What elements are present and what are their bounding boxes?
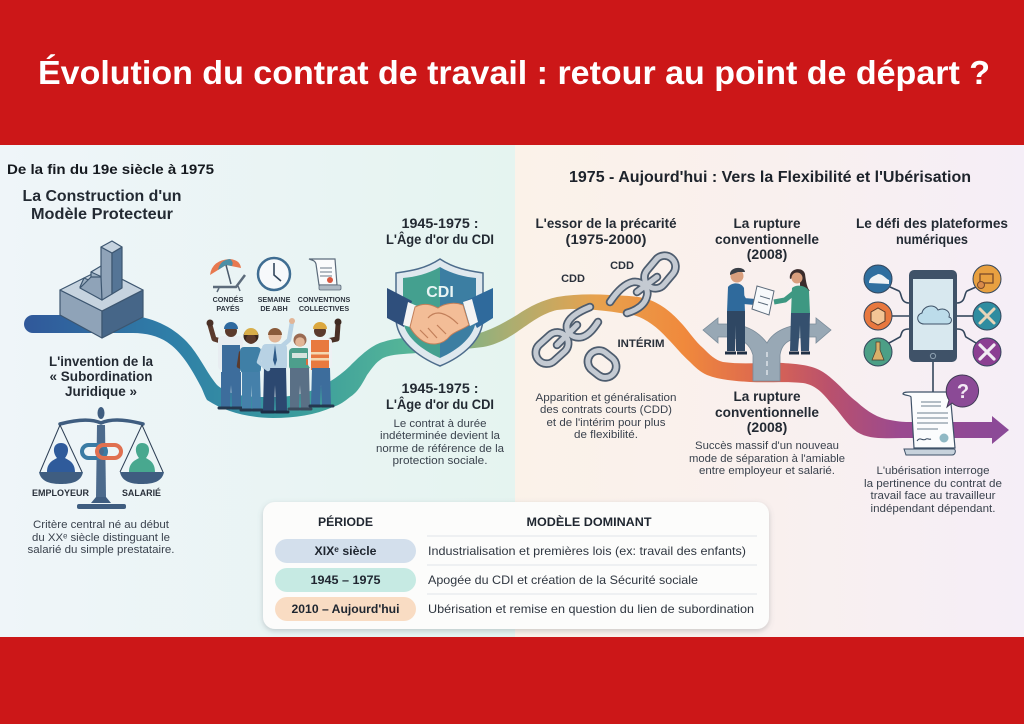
heading: subordination bbox=[49, 354, 153, 399]
worker 2 bbox=[239, 328, 262, 410]
worker 4 bbox=[289, 334, 312, 409]
heading: plateformes: numériques bbox=[896, 231, 968, 247]
text: age d'or: norme de référence de la bbox=[376, 443, 505, 455]
period heading: left: De la fin du 19e siècle à 1975 bbox=[7, 162, 215, 177]
table header: PÉRIODE bbox=[318, 514, 373, 529]
text: age d'or: protection sociale. bbox=[392, 455, 488, 467]
icon: smartphone with services bbox=[864, 265, 1001, 392]
heading: plateformes bbox=[856, 215, 1008, 247]
heading: rupture top: conventionnelle bbox=[715, 231, 819, 247]
bottom red band bbox=[0, 637, 1024, 724]
heading: précarité: (1975-2000) bbox=[566, 231, 646, 247]
text: rupture bbox=[689, 388, 845, 477]
heading: age d'or top: 1945-1975 : bbox=[402, 215, 478, 231]
table header: MODÈLE DOMINANT bbox=[526, 514, 652, 529]
heading: subordination: « Subordination bbox=[50, 369, 152, 384]
row: XIXe siècle: Industrialisation et premières lois (ex: travail des enfants) bbox=[428, 544, 746, 558]
row: 1945-1975: 1945 – 1975 bbox=[310, 573, 381, 587]
text: ubérisation bbox=[864, 465, 1002, 515]
text: ubérisation: travail face au travailleur bbox=[870, 490, 996, 502]
text: rupture: mode de séparation à l'amiable bbox=[689, 453, 845, 465]
text: ubérisation: la pertinence du contrat de bbox=[864, 478, 1002, 490]
worker 5 bbox=[308, 318, 342, 406]
text: age d'or: 1945-1975 : bbox=[402, 380, 478, 396]
labels: benefits: PAYÉS bbox=[216, 304, 240, 313]
icon: CDI shield with handshake bbox=[387, 259, 493, 366]
icon: group of workers bbox=[206, 318, 342, 412]
row: 1945-1975 bbox=[275, 568, 698, 592]
panel: summary table bbox=[263, 502, 769, 629]
heading: construction: La Construction d'un bbox=[22, 188, 182, 205]
text: rupture: entre employeur et salarié. bbox=[699, 465, 835, 477]
text: précarité description: de flexibilité. bbox=[574, 429, 638, 441]
row: XIXe siècle bbox=[275, 539, 746, 563]
label: salarié: SALARIÉ bbox=[122, 488, 161, 498]
worker 3 bbox=[259, 318, 295, 412]
text: rupture: La rupture bbox=[734, 388, 801, 404]
labels: CDD and intérim: INTÉRIM bbox=[618, 337, 664, 350]
text: précarité description: et de l'intérim pour plus bbox=[546, 417, 666, 429]
text: précarité description bbox=[536, 392, 676, 441]
heading: age d'or top: L'Âge d'or du CDI bbox=[386, 230, 494, 247]
row: 1945-1975: Apogée du CDI et création de la Sécurité sociale bbox=[428, 573, 698, 587]
icon: broken chain bbox=[531, 251, 680, 382]
labels: benefits: CONVENTIONS bbox=[298, 295, 351, 304]
labels: benefits: SEMAINE bbox=[258, 295, 291, 304]
row: 2010-aujourd'hui: 2010 – Aujourd'hui bbox=[292, 602, 400, 616]
labels: CDD and intérim bbox=[561, 260, 664, 350]
labels: benefits: DE ABH bbox=[260, 304, 288, 313]
icon: building block bbox=[60, 241, 143, 338]
text: subordination description: salarié du simple prestataire. bbox=[28, 544, 174, 556]
text: age d'or: indéterminée devient la bbox=[380, 430, 501, 442]
icon: contract with question bubble bbox=[903, 375, 979, 455]
heading: précarité bbox=[536, 215, 677, 247]
panel: left period background bbox=[0, 145, 515, 637]
row: 2010-aujourd'hui bbox=[275, 597, 754, 621]
heading: construction bbox=[22, 188, 182, 223]
text: subordination description bbox=[28, 519, 174, 556]
labels: benefits bbox=[213, 295, 351, 313]
icon: two people with document bbox=[725, 268, 810, 353]
panel: right period background bbox=[515, 145, 1024, 637]
text: age d'or: L'Âge d'or du CDI bbox=[386, 395, 494, 412]
text: subordination description: Critère central né au début bbox=[33, 519, 169, 531]
text: rupture: Succès massif d'un nouveau bbox=[695, 440, 839, 452]
text: rupture: (2008) bbox=[747, 419, 787, 435]
text: age d'or bbox=[376, 380, 505, 467]
row: 2010-aujourd'hui: Ubérisation et remise en question du lien de subordination bbox=[428, 602, 754, 616]
heading: age d'or top bbox=[386, 215, 494, 247]
icon: contract with question bubble: ? bbox=[957, 381, 969, 403]
labels: CDD and intérim: CDD bbox=[561, 273, 585, 285]
icon: beach umbrella bbox=[210, 259, 245, 292]
text: précarité description: Apparition et généralisation bbox=[536, 392, 676, 404]
text: précarité description: des contrats courts (CDD) bbox=[540, 404, 672, 416]
heading: rupture top: (2008) bbox=[747, 246, 787, 262]
heading: plateformes: Le défi des plateformes bbox=[856, 215, 1008, 231]
text: age d'or: Le contrat à durée bbox=[394, 418, 486, 430]
text: ubérisation: L'ubérisation interroge bbox=[876, 465, 990, 477]
labels: benefits: COLLECTIVES bbox=[299, 304, 349, 313]
labels: benefits: CONDÉS bbox=[213, 295, 244, 304]
labels: CDD and intérim: CDD bbox=[610, 260, 634, 272]
icon: diverging road bbox=[703, 318, 831, 381]
period heading: right: 1975 - Aujourd'hui : Vers la Flexibilité et l'Ubérisation bbox=[569, 169, 971, 186]
label: employeur: EMPLOYEUR bbox=[32, 488, 89, 498]
top title band bbox=[0, 0, 1024, 145]
title: Évolution du contrat de travail : retour au point de départ ? bbox=[38, 54, 990, 91]
icon: clock bbox=[258, 258, 290, 290]
text: ubérisation: indépendant dépendant. bbox=[870, 503, 996, 515]
text: rupture: conventionnelle bbox=[715, 404, 819, 420]
heading: rupture top: La rupture bbox=[734, 215, 801, 231]
heading: construction: Modèle Protecteur bbox=[31, 206, 173, 223]
heading: rupture top bbox=[715, 215, 819, 262]
row: XIXe siècle: XIXᵉ siècle bbox=[314, 544, 377, 558]
heading: subordination: L'invention de la bbox=[49, 354, 153, 369]
icon: CDI shield with handshake: CDI bbox=[426, 284, 454, 301]
table header bbox=[318, 514, 652, 529]
worker 1 bbox=[206, 320, 243, 408]
heading: subordination: Juridique » bbox=[65, 384, 137, 399]
text: subordination description: du XXᵉ siècle distinguant le bbox=[32, 532, 170, 544]
heading: précarité: L'essor de la précarité bbox=[536, 215, 677, 231]
icon: scales of justice bbox=[39, 407, 164, 509]
timeline ribbon arrow bbox=[24, 294, 1009, 444]
icon: convention scroll bbox=[309, 259, 341, 290]
